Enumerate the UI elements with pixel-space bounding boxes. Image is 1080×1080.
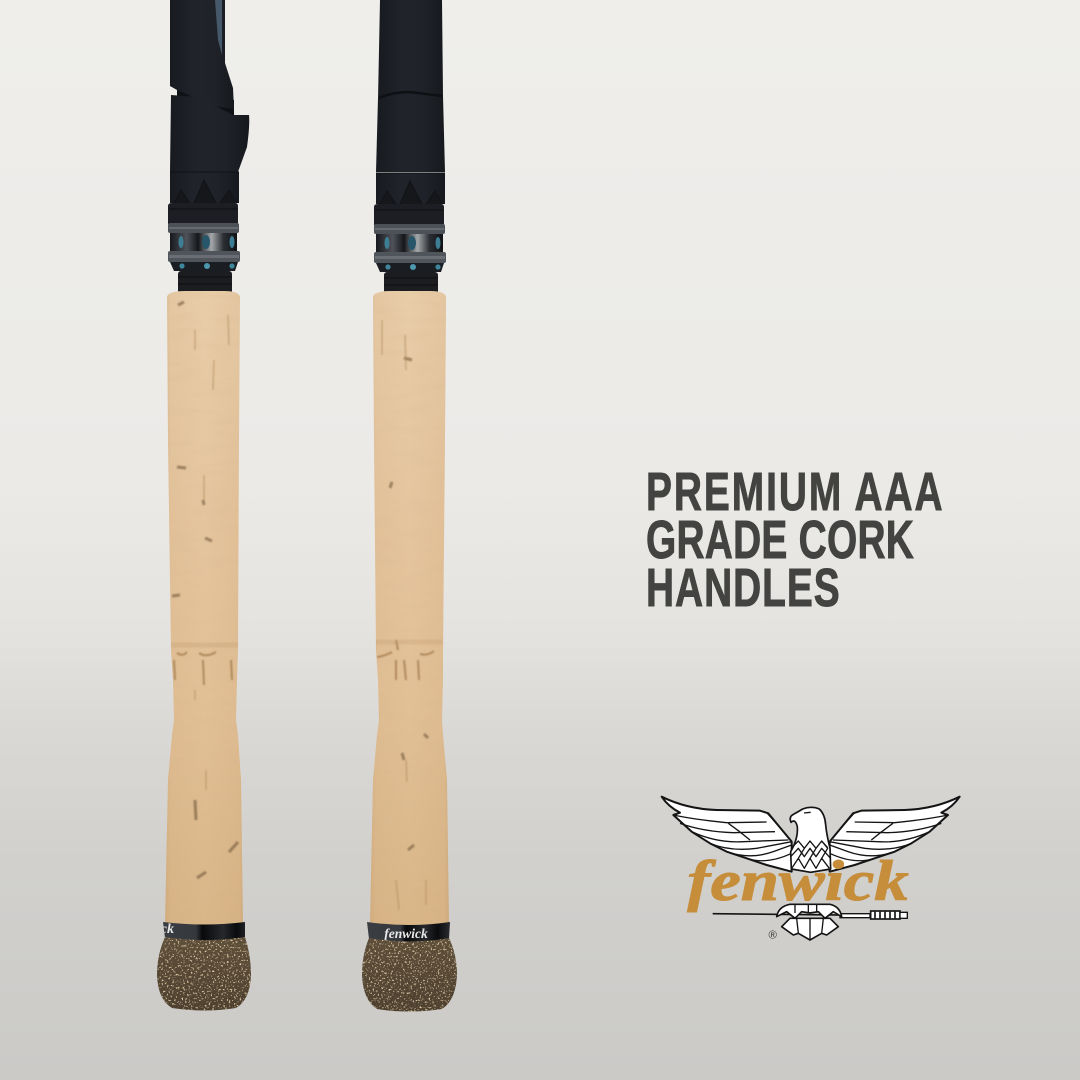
left wing (662, 797, 792, 872)
right rod: grip seam (379, 92, 442, 98)
left fishing rod handle (157, 0, 251, 1010)
left rod: reel seat hardware (168, 172, 240, 294)
headline (646, 461, 943, 617)
left band logo text: fenwick (129, 922, 174, 937)
registered mark: ® (768, 929, 777, 941)
left rod: cork grip (165, 291, 243, 924)
right rod: cork grip (370, 291, 449, 925)
right rod: reel seat hardware (374, 173, 446, 295)
left rod: black winding band (163, 922, 245, 940)
left rod: dark cork butt cap (157, 937, 251, 1010)
fishing rod emblem (713, 911, 907, 919)
right rod: black winding band with logo (367, 922, 450, 942)
left rod: black reel seat hood (170, 95, 249, 172)
left rod: upper blue-grey window (215, 0, 222, 55)
eagle head and breast (790, 807, 831, 872)
headline line 3: HANDLES (646, 557, 840, 617)
right rod: dark cork butt cap (362, 938, 457, 1012)
right band logo text: fenwick (384, 926, 428, 941)
headline line 1: PREMIUM AAA (646, 461, 943, 521)
right fishing rod handle (360, 0, 460, 1016)
headline line 2: GRADE CORK (646, 509, 914, 569)
right rod: black lower grip (376, 92, 445, 172)
left rod: black upper grip (170, 0, 234, 109)
right wing (830, 797, 960, 872)
fenwick eagle logo (662, 797, 960, 941)
eagle tail and talons (777, 904, 842, 940)
eagle wings (662, 797, 960, 872)
left rod: black backing between grip sections (177, 84, 234, 120)
right rod: black upper grip (378, 0, 443, 100)
fenwick wordmark: fenwick (687, 850, 909, 913)
